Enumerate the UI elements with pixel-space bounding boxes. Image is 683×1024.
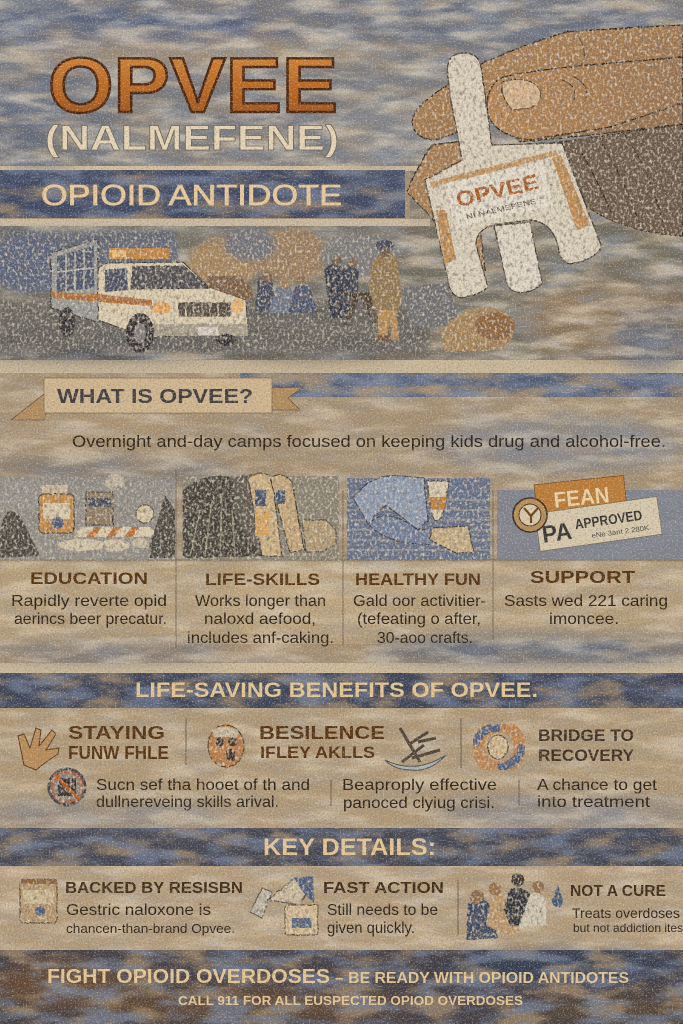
body: healthy fun: (tefeating o after, [357, 611, 481, 628]
heading: healthy fun: HEALTHY FUN [355, 570, 481, 589]
panel: healthy fun [347, 475, 490, 647]
panel: life-skills [182, 473, 339, 647]
body: education [11, 593, 167, 628]
body: healthy fun [353, 593, 486, 647]
benefit: staying [18, 723, 310, 811]
ambulance [51, 239, 253, 353]
icon: circle of hands [475, 726, 523, 768]
heading band: opioid antidote: OPIOID ANTIDOTE [41, 180, 342, 212]
body: bridge to recovery: into treatment [537, 794, 651, 811]
body: life-skills: naloxd aefood, [204, 611, 316, 628]
image: approved card [497, 475, 683, 560]
palm creases [580, 135, 665, 230]
body: healthy fun: 30-aoo crafts. [377, 630, 473, 647]
body: backed by: Gestric naloxone is [66, 902, 211, 919]
icon: orange face [208, 725, 244, 767]
device label [445, 161, 553, 228]
body: fast action [327, 902, 438, 937]
subtitle: nalmefene: (NALMEFENE) [45, 119, 339, 158]
body: life-skills [187, 593, 334, 647]
heading: backed by: BACKED BY RESISBN [65, 880, 243, 897]
heading: bridge to recovery: BRIDGE TO [538, 726, 634, 745]
heading: resilience: IFLEY AKLLS [260, 743, 375, 762]
table [342, 292, 376, 325]
benefit: bridge to recovery [475, 726, 658, 811]
heading: bridge to recovery: RECOVERY [538, 746, 635, 765]
image: straps and vegetation [182, 473, 339, 560]
heading: staying: FUNW FHLE [68, 743, 169, 763]
footer main line: FIGHT OPIOID OVERDOSES [47, 966, 330, 988]
thumbnail [502, 79, 541, 110]
body: bridge to recovery [537, 777, 658, 811]
illustration: hand holding Opvee nasal spray [407, 25, 683, 298]
lower fingers [407, 140, 485, 270]
body: resilience [342, 777, 497, 812]
body line two: not a cure: but not addiction ites [573, 921, 683, 935]
body: staying [96, 777, 310, 811]
PA mark: PA [540, 518, 574, 549]
section band: key details: KEY DETAILS: [263, 834, 436, 861]
heading: resilience: BESILENCE [259, 723, 385, 743]
seated group [255, 272, 318, 313]
benefits dividers [186, 718, 519, 806]
intro sentence: Overnight and-day camps focused on keeping kids drug and alcohol-free. [72, 432, 666, 451]
icon: prohibited sign [49, 769, 85, 805]
footer emergency line: CALL 911 FOR ALL EUSPECTED OPIOD OVERDOSES [178, 993, 523, 1008]
title: OPVEE: OPVEE [48, 41, 338, 129]
thumb [487, 57, 683, 140]
hand palm shadow [540, 124, 683, 236]
body: life-skills: includes anf-caking. [187, 630, 334, 647]
body: not a cure: Treats overdoses [572, 905, 680, 921]
device brand: OPVEE [454, 171, 541, 212]
heading: not a cure: NOT A CURE [570, 883, 666, 900]
body: fast action: given quickly. [327, 920, 415, 937]
heading: education: EDUCATION [30, 569, 148, 588]
approved small print: eNe 3ant 2 280K [591, 525, 650, 540]
icon: pharmacy box [250, 876, 318, 935]
panel: support [497, 475, 683, 628]
body: bridge to recovery: A chance to get [537, 777, 658, 794]
panel: education [0, 474, 175, 628]
section heading text: WHAT IS OPVEE? [57, 385, 253, 408]
image: collapsed person [347, 475, 490, 560]
nozzle [494, 222, 542, 292]
body: staying: Sucn sef tha hooet of th and [96, 777, 310, 794]
body line two: backed by: chancen-than-brand Opvee. [66, 922, 235, 936]
body: life-skills: Works longer than [195, 593, 326, 610]
footer secondary line: – BE READY WITH OPIOID ANTIDOTES [335, 970, 629, 987]
heading: support: SUPPORT [530, 567, 635, 587]
detail: backed by research [20, 879, 243, 936]
approved word: APPROVED [574, 507, 643, 532]
heading: life-skills: LIFE-SKILLS [205, 570, 320, 589]
heading: staying [68, 723, 169, 763]
icon: group of people [466, 874, 563, 940]
detail: not a cure [466, 874, 683, 940]
heading: resilience [259, 723, 385, 762]
body: fast action: Still needs to be [327, 902, 438, 919]
firefighter [368, 240, 402, 341]
body: support: Sasts wed 221 caring [504, 593, 668, 610]
heading: staying: STAYING [68, 723, 165, 743]
body: support: imoncee. [549, 611, 619, 628]
knuckle wrinkles [562, 38, 587, 100]
rocks [402, 282, 515, 352]
heading: bridge to recovery [538, 726, 635, 765]
body: resilience: panoced clyiug crisi. [343, 795, 495, 812]
icon: medicine can [20, 879, 57, 923]
key details divider [457, 880, 459, 935]
detail: fast action [250, 876, 444, 937]
device stripes [552, 155, 590, 230]
icon: bowl with sticks [385, 728, 446, 770]
trees and ground [0, 229, 430, 352]
section band: life-saving benefits: LIFE-SAVING BENEFITS OF OPVEE. [135, 679, 538, 702]
body: education: Rapidly reverte opid [11, 593, 167, 610]
image: medicine and bandages [0, 474, 175, 560]
heading: fast action: FAST ACTION [323, 880, 444, 897]
device body [425, 53, 601, 298]
device small print: NI NALMEFENE [466, 198, 538, 221]
body: staying: dullnereveing skills arival. [96, 794, 279, 811]
body: healthy fun: Gald oor activitier- [353, 593, 486, 610]
badge word: FEAN [552, 482, 611, 513]
icon: open hand [18, 728, 59, 770]
footer call to action [47, 966, 629, 1008]
section header: what is opvee ribbon [11, 378, 303, 420]
scene: ambulance and responders [0, 229, 515, 353]
body: support [504, 593, 668, 628]
body: education: aerincs beer precatur. [14, 611, 167, 628]
column dividers [0, 470, 683, 648]
upper hand [412, 25, 683, 142]
benefit: resilience [208, 723, 497, 812]
body: resilience: Beaproply effective [342, 777, 497, 794]
standing officers [324, 256, 359, 318]
